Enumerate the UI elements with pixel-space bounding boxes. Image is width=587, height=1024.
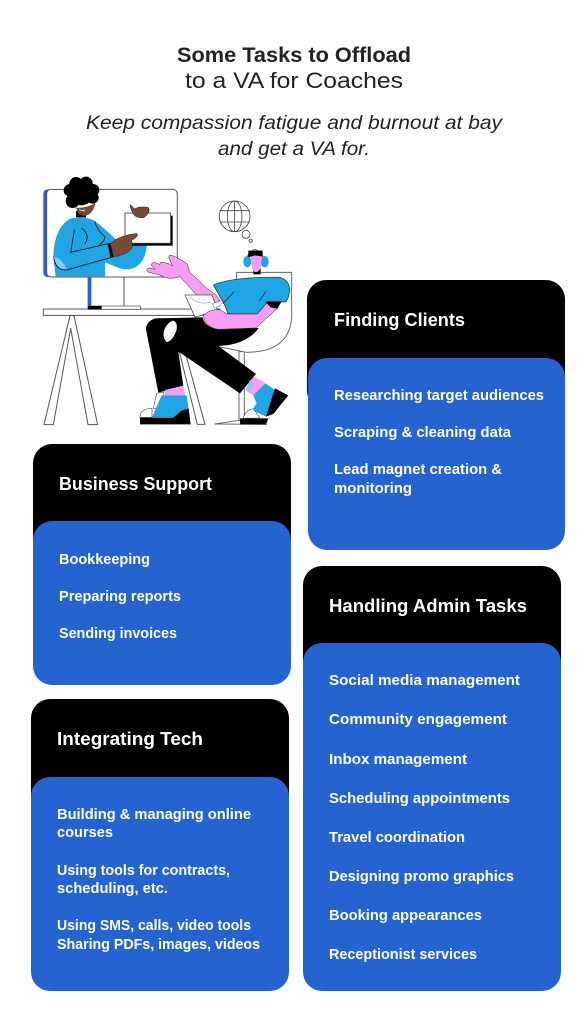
icon: coach sleeve and details [54,222,138,270]
panel: Business Support [33,444,291,685]
icon: chair [215,272,292,424]
icon: knee tear [164,321,177,342]
icon: tablet [185,295,224,317]
icon: left foot [140,386,191,424]
task list: Social media management [329,673,520,689]
task list: Researching target audiences [334,388,544,404]
icon: monitor stand [88,277,141,309]
title [177,44,411,93]
task list: Community engagement [329,712,507,728]
icon: desk right leg [179,352,205,424]
task list: Receptionist services [329,947,477,963]
task list: Using SMS, calls, video tools [57,918,251,934]
icon: tablet held by coach [125,205,173,246]
task list [59,552,181,642]
task list: Sending invoices [59,626,177,642]
heading: Handling Admin Tasks [329,596,527,616]
task list: Inbox management [329,752,467,768]
task list: scheduling, etc. [57,881,168,897]
icon: trousers [146,317,259,393]
task list: Scheduling appointments [329,791,510,807]
task list: Scraping & cleaning data [334,425,512,441]
icon: monitor screen [43,189,177,277]
task list: Building & managing online [57,807,251,823]
task list: courses [57,825,113,841]
heading: Finding Clients [334,310,465,330]
task list: Booking appearances [329,908,482,924]
panel: Finding Clients [307,280,565,550]
icon: coach body [53,217,147,276]
task list: Lead magnet creation & [334,462,503,478]
task list [57,807,260,953]
task list: Designing promo graphics [329,869,514,885]
subtitle: and get a VA for. [218,138,370,160]
icon: globe thought bubble [219,201,252,242]
illustration: video call with a coach and a virtual assistant [43,177,292,425]
heading: Integrating Tech [57,729,203,749]
subtitle [86,112,503,160]
task list: Using tools for contracts, [57,863,230,879]
task list [334,388,544,497]
icon: gesturing arm [147,255,222,303]
icon: coach head and afro hair [64,177,99,217]
heading: Business Support [59,474,212,494]
task list [329,673,520,963]
panel: Integrating Tech [31,699,289,991]
icon: virtual assistant seated on chair [140,250,292,424]
panel: Handling Admin Tasks [303,566,561,991]
task list: Sharing PDFs, images, videos [57,937,260,953]
icon: monitor and coach on screen [43,177,177,309]
task list: Preparing reports [59,589,181,605]
subtitle: Keep compassion fatigue and burnout at bay [86,112,503,134]
title: Some Tasks to Offload [177,44,411,67]
task list: Travel coordination [329,830,465,846]
task list: monitoring [334,481,412,497]
task list: Bookkeeping [59,552,150,568]
icon: headset and head [243,250,269,274]
title: to a VA for Coaches [185,68,403,93]
icon: blue tee [213,277,290,314]
icon: right foot [240,377,288,424]
icon: desk [43,309,220,425]
icon: right arm and hand [203,301,281,329]
